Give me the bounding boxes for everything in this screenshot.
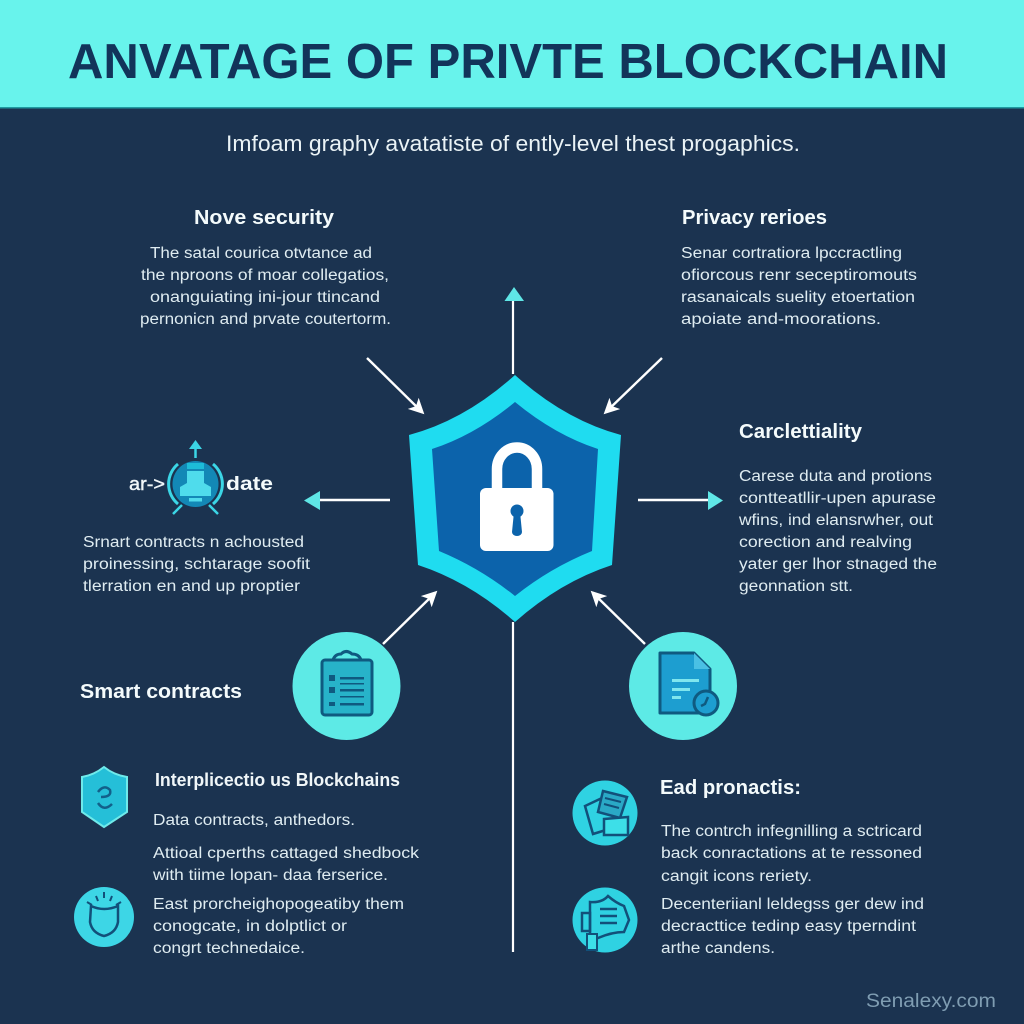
icon: gear badge with labels bbox=[129, 440, 273, 514]
text block: Carclettiality: Carese duta and protions bbox=[739, 468, 932, 485]
central shield with lock bbox=[409, 375, 621, 622]
header banner bbox=[0, 0, 1024, 108]
text block: Privacy rerioes: rasanaicals suelity etoertation bbox=[681, 289, 915, 306]
text block: Privacy rerioes: Senar cortratiora lpccractling bbox=[681, 245, 902, 262]
icon: round device bbox=[169, 440, 222, 514]
text block: Carclettiality: wfins, ind elansrwher, out bbox=[738, 512, 934, 529]
text block: Nove security: the nproons of moar collegatios, bbox=[141, 267, 389, 284]
label: ar->: ar-> bbox=[129, 474, 165, 494]
heading: Smart contracts: Smart contracts bbox=[80, 681, 242, 703]
arrow: upper right bbox=[607, 358, 662, 411]
arrow: up bbox=[504, 287, 524, 374]
text block: Carclettiality bbox=[738, 421, 937, 595]
text block: Ead pronactis: Decenteriianl leldegss ger dew ind bbox=[661, 896, 924, 913]
label: date: date bbox=[226, 474, 273, 495]
text block: Privacy rerioes: ofiorcous renr seceptiromouts bbox=[681, 267, 917, 284]
vertical divider line bbox=[512, 622, 514, 952]
subtitle: Imfoam graphy avatatiste of ently-level thest progaphics. bbox=[226, 131, 800, 156]
arrow: upper left bbox=[367, 358, 421, 411]
text block: Carclettiality: yater ger lhor stnaged the bbox=[739, 556, 937, 573]
text block: Privacy rerioes bbox=[681, 207, 917, 328]
text block: Privacy rerioes: Privacy rerioes bbox=[682, 207, 827, 229]
text block: Carclettiality: Carclettiality bbox=[739, 421, 863, 443]
text block: Ead pronactis bbox=[660, 777, 924, 957]
title: ANVATAGE OF PRIVTE BLOCKCHAIN bbox=[68, 35, 948, 89]
text block: Nove security: Nove security bbox=[194, 207, 335, 229]
text block: Carclettiality: corection and realving bbox=[739, 534, 912, 551]
icon: papers circle bbox=[572, 780, 638, 846]
text block: Interplicectio us Blockchains: Interplicectio us Blockchains bbox=[155, 770, 400, 790]
text block: Smart contracts description: Srnart contracts n achousted bbox=[83, 534, 304, 551]
icon: shield circle bbox=[74, 887, 134, 947]
text block: Ead pronactis: Ead pronactis: bbox=[660, 777, 801, 799]
text block: Interplicectio us Blockchains: East prorcheighopogeatiby them bbox=[153, 896, 404, 913]
text block: Interplicectio us Blockchains: with tiime lopan- daa ferserice. bbox=[152, 867, 388, 884]
text block: Smart contracts description: tlerration en and up proptier bbox=[83, 578, 300, 595]
text block: Carclettiality: contteatllir-upen apurase bbox=[739, 490, 936, 507]
arrow: lower right bbox=[594, 594, 645, 644]
text block: Interplicectio us Blockchains: conogcate, in dolptlict or bbox=[153, 918, 347, 935]
text block: Interplicectio us Blockchains: Attioal cperths cattaged shedbock bbox=[153, 845, 419, 862]
icon: padlock bbox=[480, 447, 554, 551]
icon: badge circle bbox=[572, 888, 638, 952]
text block: Smart contracts description bbox=[83, 534, 311, 595]
text block: Nove security: onanguiating ini-jour ttincand bbox=[150, 289, 380, 306]
text block: Ead pronactis: cangit icons reriety. bbox=[661, 868, 812, 885]
text block: Nove security: pernonicn and prvate coutertorm. bbox=[140, 311, 391, 328]
icon: checklist circle bbox=[292, 632, 400, 740]
icon: small shield badge bbox=[82, 767, 127, 827]
text block: Ead pronactis: arthe candens. bbox=[661, 940, 775, 957]
text block: Smart contracts description: proinessing, schtarage soofit bbox=[83, 556, 311, 573]
text block: Nove security: The satal courica otvtance ad bbox=[150, 245, 372, 262]
text block: Interplicectio us Blockchains bbox=[152, 770, 419, 957]
arrow: lower left bbox=[383, 594, 434, 644]
text block: Carclettiality: geonnation stt. bbox=[739, 578, 853, 595]
text block: Ead pronactis: decracttice tedinp easy tperndint bbox=[661, 918, 917, 935]
text block: Interplicectio us Blockchains: Data contracts, anthedors. bbox=[153, 812, 355, 829]
text block: Ead pronactis: The contrch infegnilling a sctricard bbox=[661, 823, 922, 840]
text block: Ead pronactis: back conractations at te ressoned bbox=[661, 845, 922, 862]
text block: Interplicectio us Blockchains: congrt technedaice. bbox=[153, 940, 305, 957]
text block: Privacy rerioes: apoiate and-moorations. bbox=[681, 311, 881, 328]
watermark: Senalexy.com bbox=[866, 991, 996, 1012]
arrow: left bbox=[304, 491, 390, 510]
arrow: right bbox=[638, 491, 723, 510]
text block: Nove security bbox=[140, 207, 391, 328]
icon: document circle bbox=[629, 632, 737, 740]
